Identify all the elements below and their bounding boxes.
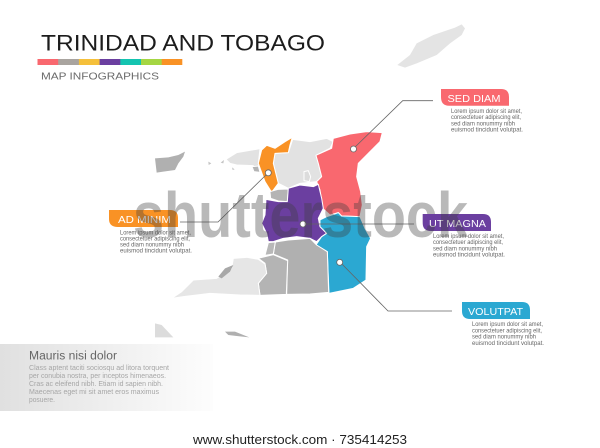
panel body text: Class aptent taciti sociosqu ad litora torquent <box>29 365 169 372</box>
callout: Ad Minim: AD MINIM <box>118 214 171 226</box>
map marker dots <box>265 146 356 265</box>
region: islets <box>208 160 235 170</box>
map: Tobago island <box>397 24 465 68</box>
callout: Volutpat <box>462 302 544 347</box>
callout: Volutpat: euismod tincidunt volutpat. <box>472 341 544 347</box>
panel body text: Maecenas eget mi sit amet eros maximus <box>29 389 159 396</box>
panel body text: per conubia nostra, per inceptos himenaeos. <box>29 373 166 380</box>
leader line: Sed Diam <box>353 101 433 149</box>
callout: Ad Minim: consectetuer adipiscing elit, <box>120 236 190 242</box>
leader line: Ad Minim <box>180 173 268 222</box>
footer url: www.shutterstock.com · 735414253 <box>192 432 407 447</box>
region: purple <box>262 184 327 242</box>
callout: Ut Magna <box>423 214 505 258</box>
callout: Volutpat: sed diam nonummy nibh <box>472 334 536 340</box>
callout: Ad Minim <box>109 210 192 254</box>
colour bar <box>38 59 182 65</box>
panel body text: Cras ac eleifend nibh. Etiam id sapien nibh. <box>29 381 163 388</box>
leader line: Volutpat <box>340 262 452 311</box>
region: small grey <box>252 166 260 172</box>
callout: Ut Magna: sed diam nonummy nibh <box>433 246 497 252</box>
panel heading: Mauris nisi dolor <box>29 350 117 362</box>
callout: Sed Diam: sed diam nonummy nibh <box>451 122 515 128</box>
region: south grey <box>258 255 288 295</box>
leader line: Ut Magna <box>303 223 414 225</box>
callout: Sed Diam: SED DIAM <box>448 93 500 105</box>
callout: Sed Diam: euismod tincidunt volutpat. <box>451 128 523 134</box>
callout: Sed Diam: Lorem ipsum dolor sit amet, <box>451 109 522 115</box>
region: south-east grey <box>273 238 329 294</box>
region: south-west <box>172 257 267 298</box>
callout: Volutpat: Lorem ipsum dolor sit amet, <box>472 322 543 328</box>
panel: Mauris nisi dolor <box>0 344 213 411</box>
title: TRINIDAD AND TOBAGO <box>41 30 325 56</box>
callout: Sed Diam: consectetuer adipiscing elit, <box>451 115 521 121</box>
callout: Ut Magna: UT MAGNA <box>429 218 486 230</box>
callout: Ad Minim: sed diam nonummy nibh <box>120 242 184 248</box>
region: blue <box>316 213 371 293</box>
region: west island <box>155 152 185 173</box>
callout: Sed Diam <box>441 89 523 134</box>
region: red <box>316 132 382 217</box>
region: lake <box>304 171 311 182</box>
callout: Ut Magna: consectetuer adipiscing elit, <box>433 240 503 246</box>
callout: Volutpat: consectetuer adipiscing elit, <box>472 328 542 334</box>
callout: Ut Magna: Lorem ipsum dolor sit amet, <box>433 234 504 240</box>
map: Trinidad regions <box>155 132 382 298</box>
map: bottom fragments <box>155 323 249 337</box>
region: central light <box>273 138 333 188</box>
region: small south grey <box>265 242 275 255</box>
region: south-west lake <box>218 265 233 278</box>
callout: Ad Minim: euismod tincidunt volutpat. <box>120 248 192 254</box>
panel body text <box>29 365 169 404</box>
callout: Volutpat: VOLUTPAT <box>468 306 524 318</box>
region: north-west peninsula <box>226 149 260 173</box>
callout: Ad Minim: Lorem ipsum dolor sit amet, <box>120 230 191 236</box>
region: small grey north <box>270 189 288 202</box>
panel body text: posuere. <box>29 397 55 404</box>
watermark: shutterstock <box>133 179 468 251</box>
region: orange <box>258 137 292 192</box>
subtitle: MAP INFOGRAPHICS <box>41 70 159 82</box>
callout: Ut Magna: euismod tincidunt volutpat. <box>433 252 505 258</box>
